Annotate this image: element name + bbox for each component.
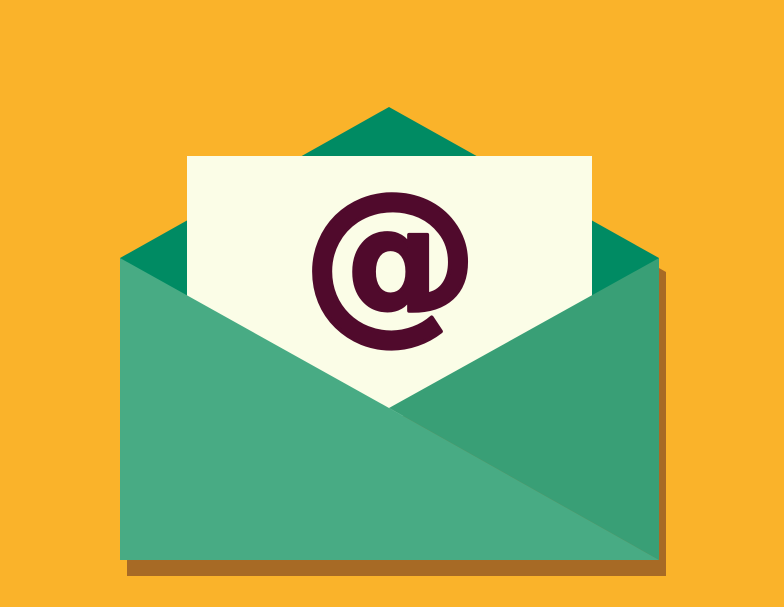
envelope back flap <box>120 107 659 400</box>
envelope left panel <box>120 258 659 560</box>
letter paper <box>187 156 592 416</box>
at sign icon: @ <box>302 155 478 360</box>
envelope right panel <box>389 258 659 560</box>
envelope shadow <box>127 268 666 576</box>
